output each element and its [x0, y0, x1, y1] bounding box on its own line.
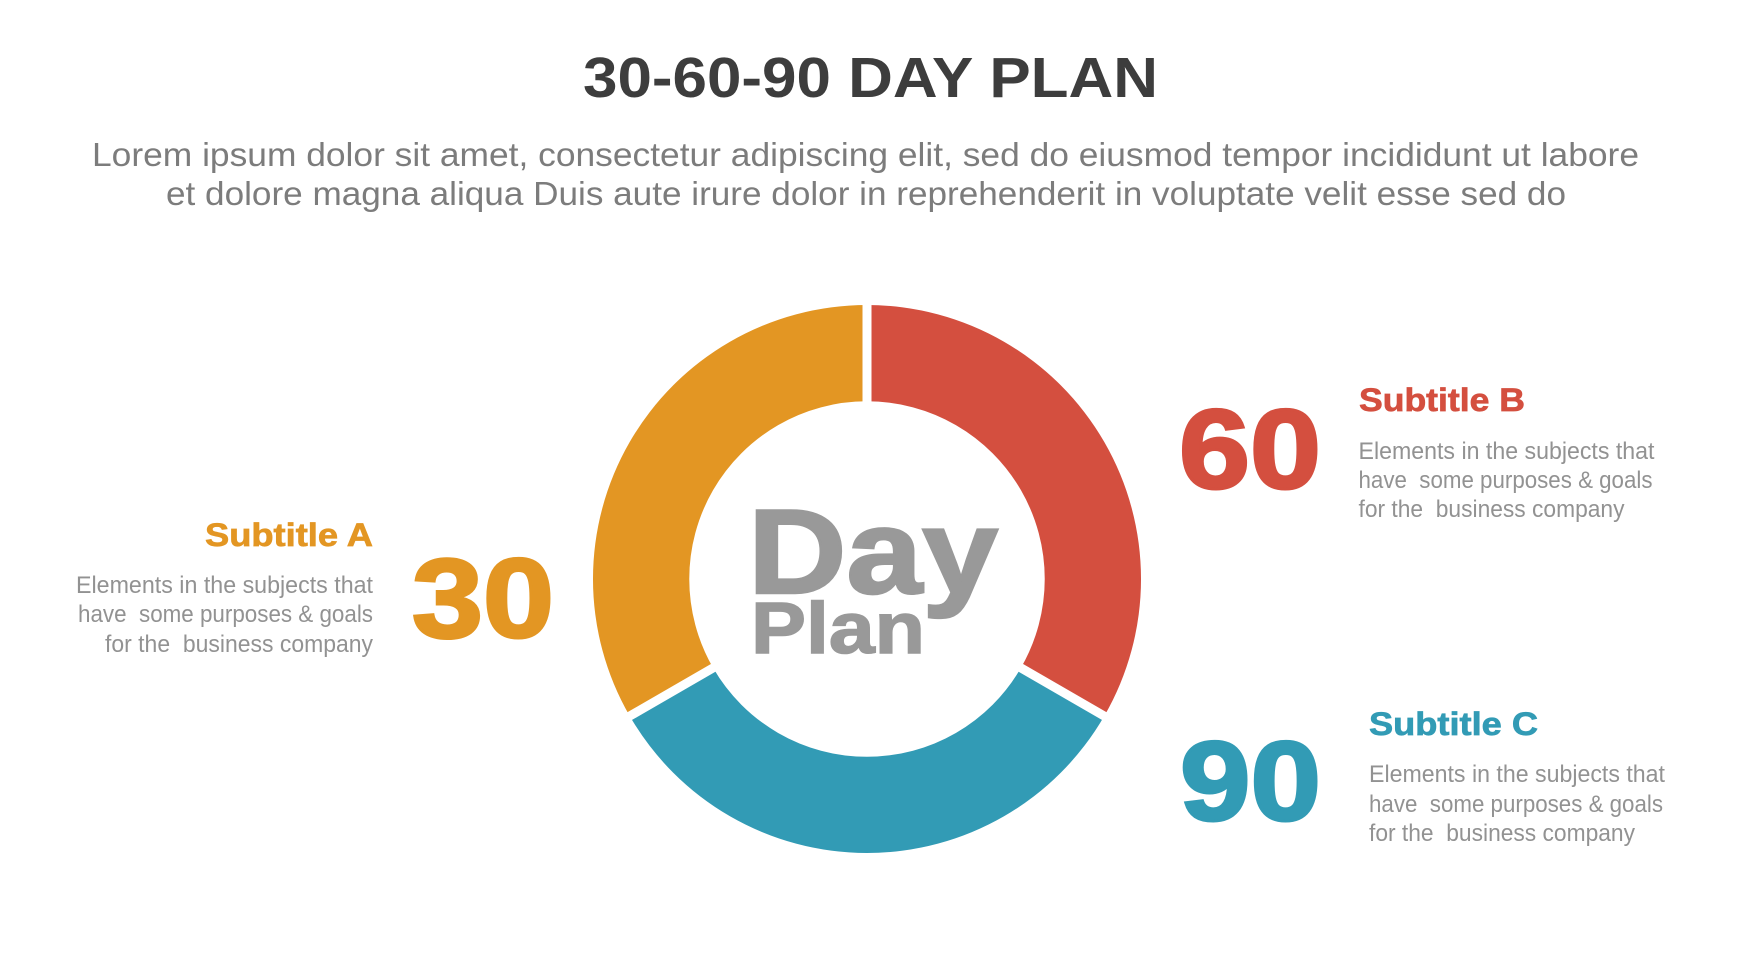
- number 60: 60: [1179, 387, 1321, 512]
- heading A: Subtitle A: [205, 517, 373, 553]
- description B: for the business company: [1358, 496, 1624, 523]
- description C: have some purposes & goals: [1369, 791, 1663, 818]
- donut chart: [593, 295, 1141, 853]
- heading C: Subtitle C: [1369, 706, 1538, 742]
- description B: [1358, 438, 1655, 523]
- description B: Elements in the subjects that: [1358, 438, 1655, 465]
- description A: Elements in the subjects that: [76, 572, 373, 599]
- intro text: [92, 136, 1639, 212]
- center label: [748, 485, 998, 669]
- center label: Day: [748, 485, 998, 619]
- number 30: 30: [412, 536, 554, 661]
- description C: [1369, 761, 1665, 847]
- description A: [76, 572, 373, 658]
- segment: 90 teal: [630, 668, 1104, 853]
- number 90: 90: [1180, 719, 1321, 844]
- callout: subtitle C: [1180, 706, 1665, 847]
- callout: subtitle B: [1179, 382, 1655, 523]
- segment: 30 orange: [593, 305, 867, 716]
- description C: for the business company: [1369, 820, 1635, 847]
- description B: have some purposes & goals: [1358, 467, 1652, 494]
- description A: have some purposes & goals: [78, 601, 373, 628]
- description C: Elements in the subjects that: [1369, 761, 1665, 788]
- title: 30-60-90 DAY PLAN: [583, 46, 1158, 110]
- segment: 60 red: [867, 305, 1141, 716]
- heading B: Subtitle B: [1359, 382, 1525, 418]
- intro text: et dolore magna aliqua Duis aute irure dolor in reprehenderit in voluptate velit esse sed do: [166, 175, 1566, 212]
- intro text: Lorem ipsum dolor sit amet, consectetur adipiscing elit, sed do eiusmod tempor incididunt ut labore: [92, 136, 1639, 173]
- center label: Plan: [751, 589, 925, 669]
- description A: for the business company: [105, 631, 373, 658]
- callout: subtitle A: [76, 517, 554, 661]
